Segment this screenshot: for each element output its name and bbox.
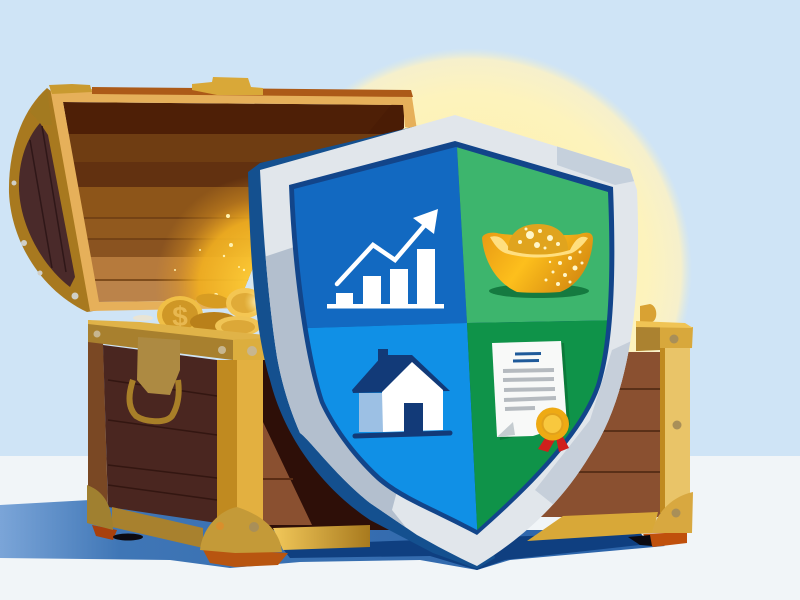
golden glow	[248, 48, 692, 492]
floor	[0, 456, 800, 600]
seal	[536, 408, 569, 440]
bottom strip right	[527, 512, 658, 541]
ingot sparkles	[518, 228, 584, 286]
quadrant bottom right	[467, 320, 607, 530]
chest lid	[8, 77, 416, 312]
coins: $	[172, 301, 188, 332]
corner band left	[217, 360, 237, 530]
shield outer blue edge	[248, 117, 495, 569]
right wood and shadowed centre	[260, 340, 390, 530]
shield	[240, 115, 655, 569]
background sky	[0, 0, 800, 456]
lid right dark corner	[368, 104, 404, 135]
bottom strip left	[112, 507, 203, 548]
icon: certificate	[492, 341, 570, 452]
floor shadow	[0, 500, 665, 570]
shield inner border	[289, 141, 614, 535]
chest body	[87, 320, 693, 567]
quadrant bottom left	[308, 323, 478, 530]
left side wood	[88, 340, 108, 510]
lid interior planks	[63, 102, 404, 302]
corner plate left	[87, 485, 113, 530]
coin: left large	[157, 296, 203, 334]
corner plate centre	[200, 507, 282, 553]
quadrant top left	[294, 147, 467, 328]
sparkle glow	[160, 180, 252, 301]
sparkles	[174, 214, 245, 297]
shield rim	[260, 115, 638, 566]
quadrant top right	[457, 147, 610, 323]
lid frame	[50, 88, 417, 311]
top rim right	[636, 326, 693, 351]
ribbon	[538, 433, 569, 452]
icon: house	[352, 349, 450, 436]
icon: growth chart	[327, 209, 444, 308]
top rim left	[88, 320, 265, 360]
corner plate right	[652, 492, 693, 533]
feet	[92, 525, 117, 540]
lid rivets	[12, 109, 78, 300]
rim rivets	[94, 330, 257, 356]
lid corner plate	[30, 90, 52, 125]
lid hasp	[192, 77, 263, 95]
lid side panel	[9, 88, 100, 312]
icon: gold ingot	[482, 224, 593, 298]
coins	[133, 288, 656, 336]
rim shading facets	[266, 146, 634, 528]
side band right	[665, 348, 690, 513]
handle	[130, 380, 179, 421]
dark contact shadow under chest	[280, 532, 648, 570]
hasp plate	[137, 337, 180, 395]
shield field	[294, 147, 610, 530]
lid left cap	[49, 84, 92, 94]
